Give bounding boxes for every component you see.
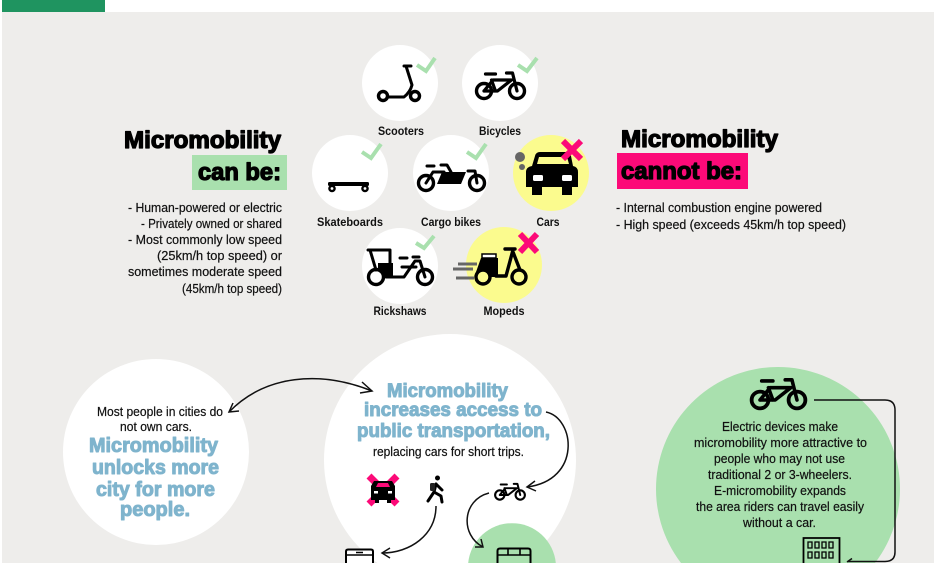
heading: Micromobility cannot be: cannot be: bbox=[621, 158, 742, 185]
item: bicycles: Bicycles bbox=[479, 124, 521, 138]
heading: Micromobility can be: Micromobility bbox=[124, 127, 282, 154]
heading: Micromobility can be bbox=[124, 127, 287, 190]
text: electric devices: micromobility more attractive to bbox=[694, 436, 867, 450]
icon: bicycle small bbox=[495, 484, 525, 500]
item: cars bbox=[513, 135, 589, 229]
heading: Micromobility cannot be: Micromobility bbox=[621, 126, 779, 153]
text: electric devices: the area riders can travel easily bbox=[696, 500, 865, 514]
text: electric devices bbox=[694, 420, 867, 530]
list: can be: (25km/h top speed) or bbox=[157, 249, 282, 263]
text: electric devices: people who may not use bbox=[714, 452, 845, 466]
item: scooters: Scooters bbox=[378, 124, 424, 138]
panel: unlocks more city bbox=[63, 359, 249, 545]
heading: Micromobility cannot be bbox=[617, 126, 779, 189]
item: bicycles bbox=[462, 45, 538, 138]
icon: bus bbox=[497, 548, 531, 563]
heading: Micromobility can be: can be: bbox=[198, 159, 281, 186]
panel: unlocks more city: Micromobility bbox=[89, 435, 219, 457]
panel: access to public transportation: Micromobility bbox=[387, 381, 508, 402]
arrow: access to bicycle bbox=[527, 412, 568, 491]
list: can be: - Privately owned or shared bbox=[141, 217, 282, 231]
panel: access to public transportation: replacing cars for short trips. bbox=[373, 445, 524, 459]
panel: access to public transportation: public transportation, bbox=[357, 421, 550, 442]
panel: unlocks more city: Most people in cities do bbox=[97, 405, 223, 419]
item: cars: Cars bbox=[536, 215, 560, 229]
arrow: people to access bbox=[229, 379, 372, 412]
item: rickshaws: Rickshaws bbox=[374, 304, 427, 318]
list: cannot be: - High speed (exceeds 45km/h top speed) bbox=[616, 218, 846, 232]
arrow: bus to walking bbox=[382, 506, 436, 558]
circle: transit bbox=[468, 523, 556, 563]
item: cargo bikes bbox=[413, 135, 489, 229]
list: can be: sometimes moderate speed bbox=[128, 265, 282, 279]
icon: walking person bbox=[428, 476, 442, 502]
panel: cannot be bbox=[616, 126, 846, 232]
arrow: electric bike to building bbox=[814, 400, 895, 562]
text: electric devices: without a car. bbox=[742, 516, 816, 530]
panel: unlocks more city: people. bbox=[120, 499, 190, 521]
item: mopeds bbox=[453, 227, 542, 318]
list: can be bbox=[128, 201, 282, 296]
list: cannot be bbox=[616, 201, 846, 232]
icon: electric bike bbox=[752, 380, 805, 408]
list: can be: (45km/h top speed) bbox=[182, 282, 282, 296]
list: can be: - Most commonly low speed bbox=[128, 233, 282, 247]
item: skateboards bbox=[312, 135, 388, 229]
panel: unlocks more city: city for more bbox=[96, 479, 215, 501]
list: can be: - Human-powered or electric bbox=[128, 201, 282, 215]
item: rickshaws bbox=[362, 228, 438, 318]
text: electric devices: Electric devices make bbox=[722, 420, 838, 434]
item: mopeds: Mopeds bbox=[484, 304, 525, 318]
icon: building bbox=[804, 538, 840, 563]
panel: electric devices bbox=[656, 367, 900, 563]
item: skateboards: Skateboards bbox=[317, 215, 383, 229]
item: scooters bbox=[362, 45, 438, 138]
icon: phone or bus outline bbox=[346, 550, 373, 563]
panel: access to public transportation: increases access to bbox=[364, 400, 542, 421]
panel: unlocks more city: unlocks more bbox=[92, 457, 219, 479]
panel: access to public transportation bbox=[324, 334, 576, 563]
item: cargo bikes: Cargo bikes bbox=[421, 215, 481, 229]
icon: crossed car bbox=[369, 476, 397, 504]
panel: unlocks more city: not own cars. bbox=[120, 420, 192, 434]
text: electric devices: traditional 2 or 3-wheelers. bbox=[708, 468, 852, 482]
panel: can be bbox=[124, 127, 287, 296]
text: electric devices: E-micromobility expands bbox=[714, 484, 846, 498]
top green tab bbox=[2, 0, 105, 12]
list: cannot be: - Internal combustion engine powered bbox=[616, 201, 822, 215]
arrow: bicycle to transit bbox=[467, 493, 489, 547]
